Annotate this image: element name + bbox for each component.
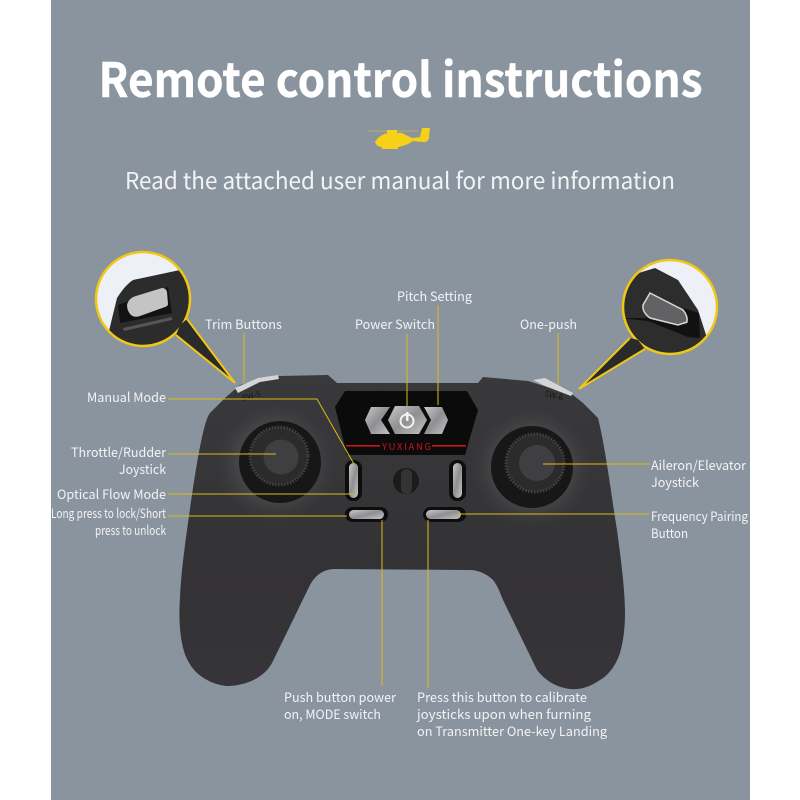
label: Pitch Setting: Pitch Setting bbox=[397, 286, 473, 305]
right shoulder button bbox=[533, 378, 573, 396]
label: Throttle/Rudder Joystick: Joystick bbox=[119, 459, 167, 478]
left shoulder button bbox=[235, 375, 279, 393]
label: Push button power on: Push button power bbox=[284, 687, 397, 706]
label: calibrate joysticks bbox=[416, 687, 608, 740]
label: calibrate joysticks: Press this button to calibrate bbox=[417, 687, 587, 706]
controller body bbox=[179, 375, 625, 689]
red brand line: YUXIANG bbox=[381, 439, 431, 453]
right switch label: SW-6 bbox=[543, 388, 565, 404]
label: Power Switch: Power Switch bbox=[355, 314, 435, 333]
left vertical switch bbox=[345, 460, 362, 501]
label: calibrate joysticks: on Transmitter One-key Landing bbox=[417, 721, 608, 740]
label: Push button power on bbox=[284, 687, 397, 723]
callout: right zoom circle bbox=[579, 260, 717, 389]
label: Frequency Pairing Button: Frequency Pairing bbox=[651, 506, 749, 525]
callout: left zoom circle bbox=[96, 252, 235, 383]
right chevron button bbox=[424, 407, 448, 434]
label: Aileron/Elevator Joystick: Joystick bbox=[651, 472, 700, 491]
right vertical switch bbox=[449, 460, 466, 501]
label: Frequency Pairing Button bbox=[651, 506, 749, 542]
leader lines bbox=[168, 305, 650, 688]
subtitle: Read the attached user manual for more information bbox=[125, 162, 675, 196]
label: Push button power on: on, MODE switch bbox=[284, 704, 381, 723]
label: Long press: Long press to lock/Short bbox=[51, 503, 166, 522]
label: Long press: press to unlock bbox=[95, 520, 167, 539]
left horizontal switch bbox=[345, 507, 388, 522]
left switch label: SW-5 bbox=[241, 389, 262, 404]
title: Remote control instructions bbox=[98, 42, 702, 111]
label: Long press bbox=[51, 503, 167, 539]
red brand line bbox=[346, 439, 466, 453]
label: Aileron/Elevator Joystick: Aileron/Elevator bbox=[651, 455, 747, 474]
display panel bbox=[335, 391, 478, 455]
power button bbox=[388, 406, 427, 434]
left chevron button bbox=[365, 407, 390, 434]
label: Optical Flow Mode: Optical Flow Mode bbox=[57, 484, 166, 503]
left joystick bbox=[214, 400, 338, 524]
label: calibrate joysticks: joysticks upon when furning bbox=[416, 704, 592, 723]
right joystick bbox=[470, 405, 594, 529]
centre toggle bbox=[393, 468, 419, 494]
label: Aileron/Elevator Joystick bbox=[651, 455, 747, 491]
label: Manual Mode: Manual Mode bbox=[87, 387, 166, 406]
controller bbox=[179, 375, 625, 689]
icon: helicopter bbox=[368, 128, 430, 149]
label: Throttle/Rudder Joystick: Throttle/Rudder bbox=[71, 442, 167, 461]
label: One-push: One-push bbox=[520, 314, 577, 333]
label: Throttle/Rudder Joystick bbox=[71, 442, 167, 478]
label: Trim Buttons: Trim Buttons bbox=[205, 314, 282, 333]
right horizontal switch bbox=[423, 507, 466, 522]
label: Frequency Pairing Button: Button bbox=[651, 523, 688, 542]
